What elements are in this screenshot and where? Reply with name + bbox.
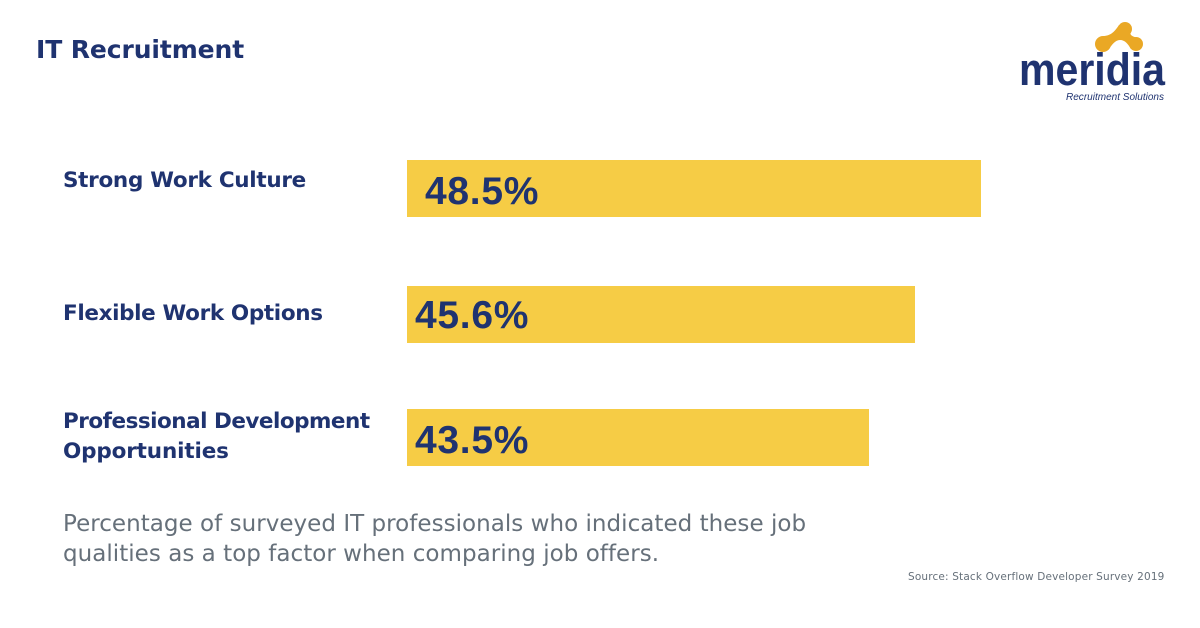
label: professional development opportunities: Professional Development	[63, 409, 370, 434]
label: flexible work options: Flexible Work Options	[63, 301, 323, 326]
source note: Source: Stack Overflow Developer Survey 2019	[908, 571, 1165, 583]
label: professional development opportunities: Opportunities	[63, 439, 229, 464]
label: strong work culture: Strong Work Culture	[63, 168, 306, 193]
logo wordmark: meridia	[1019, 44, 1166, 95]
logo tagline: Recruitment Solutions	[1066, 91, 1165, 103]
label: professional development opportunities	[63, 409, 370, 464]
description text	[63, 511, 806, 567]
logo: meridia	[1019, 22, 1166, 103]
description text: Percentage of surveyed IT professionals who indicated these job	[63, 511, 806, 537]
bar: 48.5%	[407, 160, 981, 217]
value: 45.6%: 45.6%	[415, 294, 529, 337]
title: IT Recruitment	[36, 35, 244, 64]
bar: 45.6%	[407, 286, 915, 343]
description text: qualities as a top factor when comparing job offers.	[63, 541, 659, 567]
icon: logo network mark	[1095, 22, 1143, 52]
value: 48.5%: 48.5%	[425, 170, 539, 213]
bar: 43.5%	[407, 409, 869, 466]
value: 43.5%: 43.5%	[415, 419, 529, 462]
